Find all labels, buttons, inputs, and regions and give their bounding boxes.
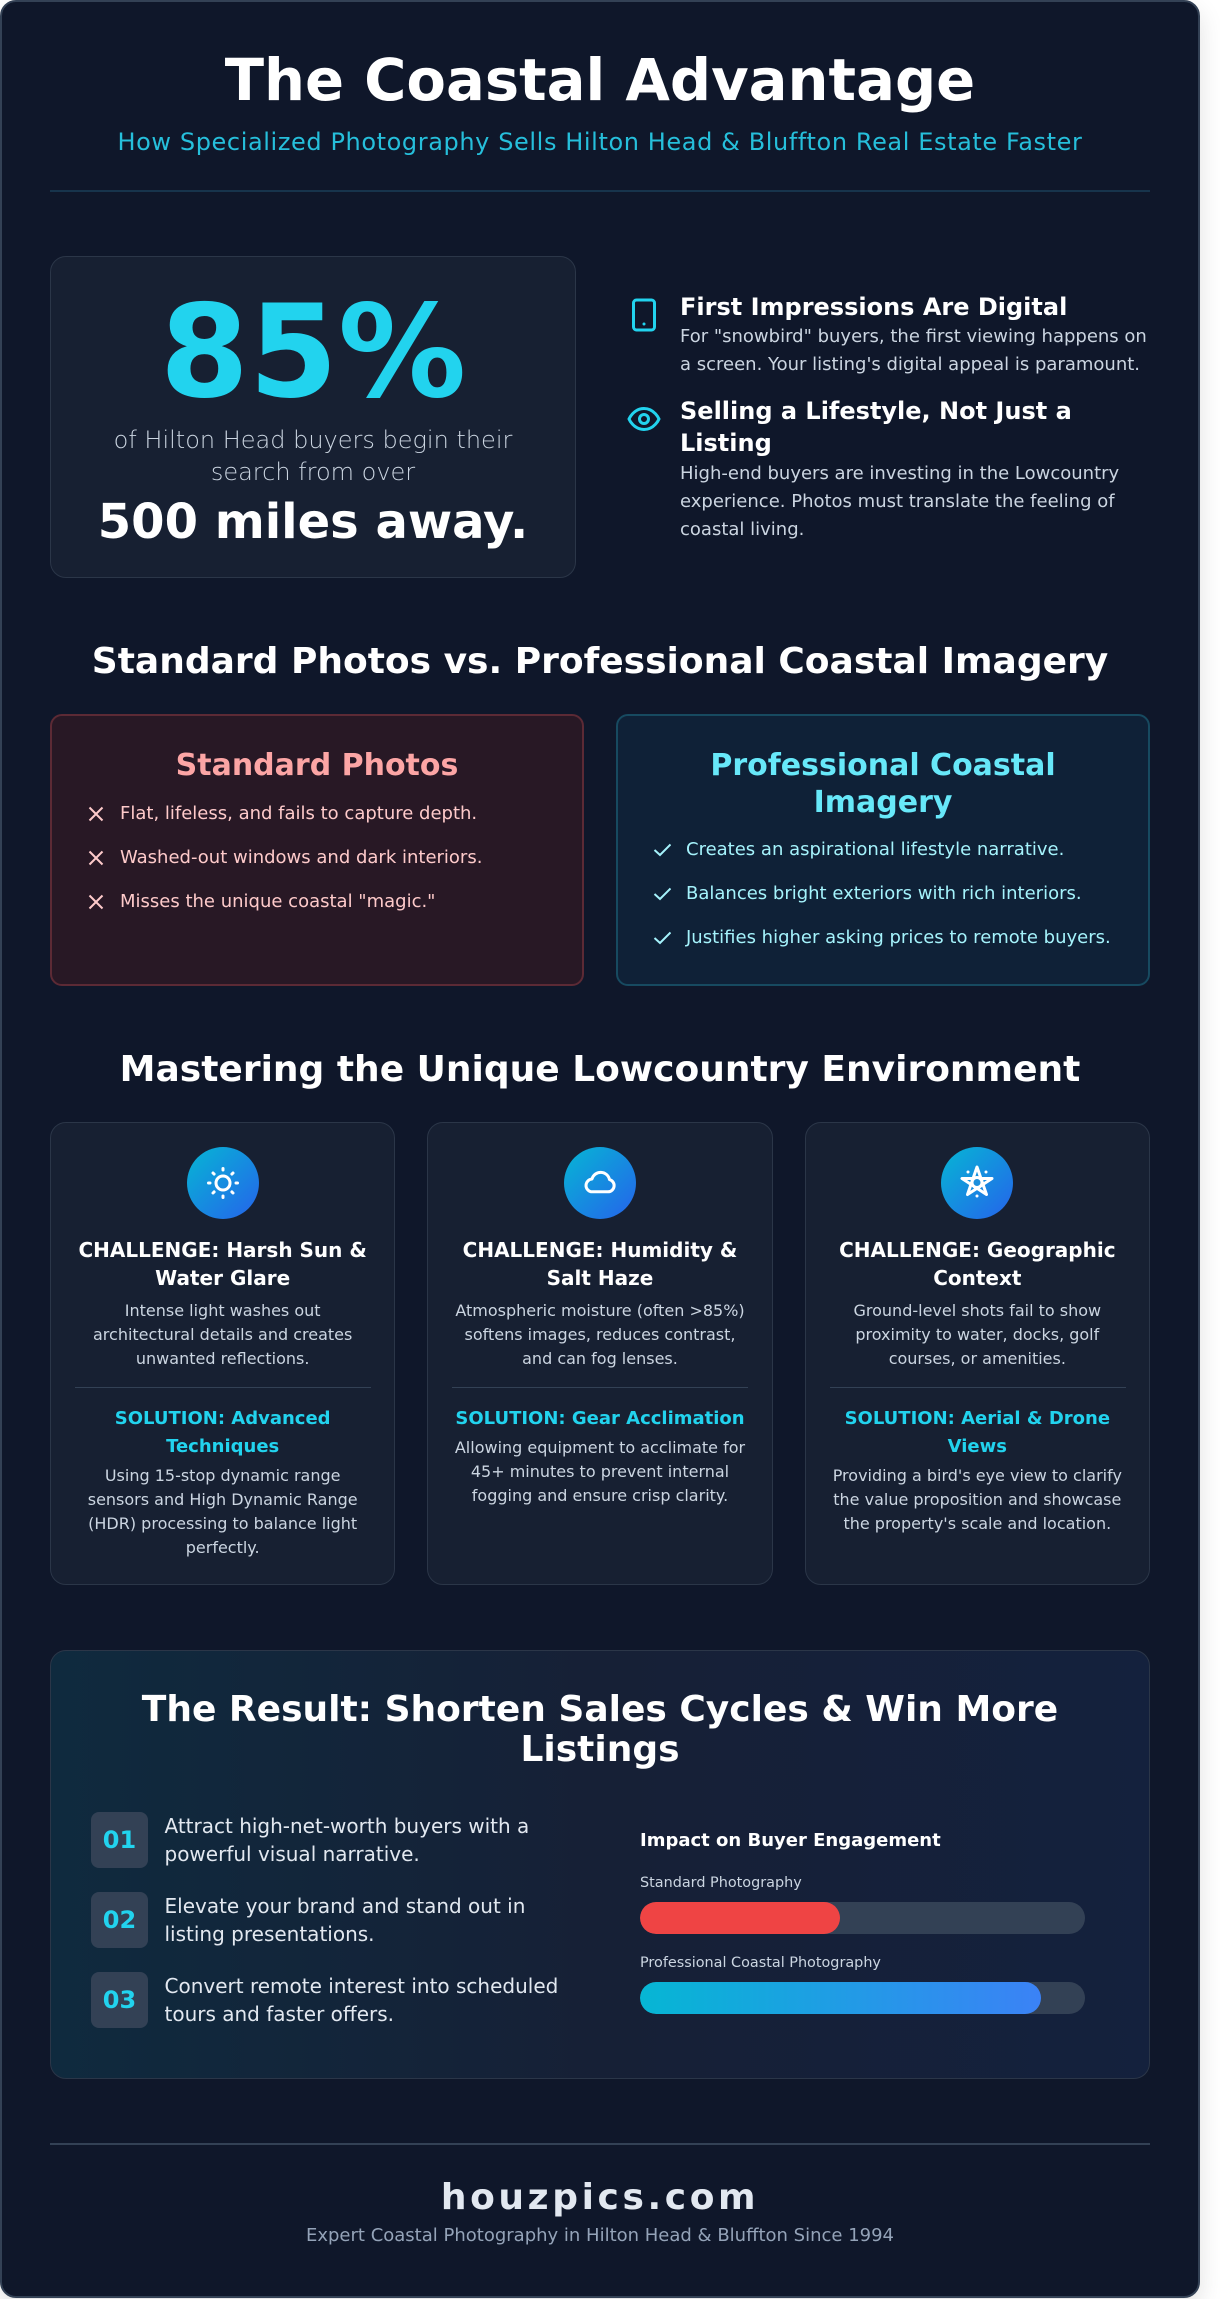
list: drawbacks: Flat, lifeless, and fails to capture depth. (120, 803, 477, 824)
benefit 1: powerful visual narrative. (164, 1842, 420, 1866)
solution text: (HDR) processing to balance light (88, 1514, 357, 1533)
solution text: the value proposition and showcase (833, 1490, 1121, 1509)
challenge text: architectural details and creates (93, 1325, 352, 1344)
big number: 85% (160, 278, 466, 427)
panel heading: Professional Coastal (710, 748, 1056, 783)
label: professional: Professional Coastal Photography (640, 1955, 881, 1971)
panel: professional imagery (616, 714, 1150, 986)
benefit 3: tours and faster offers. (164, 2002, 394, 2026)
challenge text: courses, or amenities. (889, 1349, 1066, 1368)
statistic description (114, 426, 512, 486)
list: result benefits (91, 1812, 558, 2028)
number 03: 03 (103, 1986, 136, 2014)
panel: standard photos (50, 714, 584, 986)
panel heading: Imagery (814, 785, 952, 820)
heading: first impressions: First Impressions Are Digital (680, 293, 1067, 321)
chart title: Impact on Buyer Engagement (640, 1830, 941, 1851)
icon: sun (187, 1147, 259, 1219)
solution title (115, 1408, 331, 1457)
number 01 (91, 1812, 148, 1868)
result heading: Listings (520, 1729, 680, 1770)
result heading: The Result: Shorten Sales Cycles & Win More (142, 1689, 1058, 1730)
panel: the result (50, 1650, 1150, 2079)
challenge text: Intense light washes out (125, 1301, 321, 1320)
challenge title: Context (933, 1266, 1021, 1290)
text: lifestyle: High-end buyers are investing in the Lowcountry (680, 463, 1119, 484)
benefit 2 (164, 1894, 525, 1946)
text: first impressions (680, 326, 1147, 375)
challenge text: Atmospheric moisture (often >85%) (455, 1301, 745, 1320)
heading: environment: Mastering the Unique Lowcountry Environment (120, 1049, 1080, 1090)
challenge text (455, 1301, 745, 1368)
solution text: Allowing equipment to acclimate for (455, 1438, 745, 1457)
solution text: 45+ minutes to prevent internal (471, 1462, 729, 1481)
icon: eye (628, 407, 660, 431)
panel heading: Standard Photos (176, 748, 458, 783)
list: benefits: Justifies higher asking prices to remote buyers. (686, 927, 1111, 948)
subtitle: How Specialized Photography Sells Hilton Head & Bluffton Real Estate Faster (118, 128, 1082, 156)
list: benefits: Creates an aspirational lifestyle narrative. (686, 839, 1064, 860)
list: drawbacks (88, 803, 482, 912)
text: lifestyle (680, 463, 1119, 540)
solution text: fogging and ensure crisp clarity. (472, 1486, 728, 1505)
footer brand: houzpics.com (441, 2177, 759, 2218)
result heading (142, 1689, 1058, 1770)
solution text: Providing a bird's eye view to clarify (833, 1466, 1122, 1485)
panel: geographic challenge (805, 1122, 1150, 1585)
list: drawbacks: Misses the unique coastal "magic." (120, 891, 435, 912)
challenge text (854, 1301, 1101, 1368)
solution text (833, 1466, 1122, 1533)
bar: standard 45% (640, 1902, 1085, 1934)
benefit 1 (164, 1814, 529, 1866)
solution title: Techniques (166, 1436, 279, 1457)
text: first impressions: a screen. Your listing's digital appeal is paramount. (680, 354, 1140, 375)
panel: harsh sun challenge (50, 1122, 395, 1585)
label: standard: Standard Photography (640, 1875, 802, 1891)
challenge title (839, 1238, 1116, 1290)
bar: professional 90% (640, 1982, 1085, 2014)
list: benefits (654, 839, 1111, 948)
panel: 85% statistic (50, 256, 576, 578)
heading: lifestyle: Selling a Lifestyle, Not Just a (680, 397, 1072, 425)
solution text: Using 15-stop dynamic range (105, 1466, 340, 1485)
panel: humidity challenge (427, 1122, 773, 1585)
challenge title: CHALLENGE: Harsh Sun & (78, 1238, 367, 1262)
challenge text: proximity to water, docks, golf (855, 1325, 1099, 1344)
panel heading (710, 748, 1056, 820)
solution title: SOLUTION: Aerial & Drone (845, 1408, 1110, 1429)
challenge title (463, 1238, 737, 1290)
list: drawbacks: Washed-out windows and dark interiors. (120, 847, 482, 868)
heading: lifestyle (680, 397, 1072, 457)
number 01: 01 (103, 1826, 136, 1854)
solution text: the property's scale and location. (843, 1514, 1111, 1533)
solution title: SOLUTION: Advanced (115, 1408, 331, 1429)
challenge text (93, 1301, 352, 1368)
solution text (455, 1438, 746, 1505)
challenge title: Salt Haze (547, 1266, 653, 1290)
heading: lifestyle: Listing (680, 429, 772, 457)
challenge title: Water Glare (155, 1266, 290, 1290)
benefit 1: Attract high-net-worth buyers with a (164, 1814, 529, 1838)
icon: smartphone (632, 298, 656, 332)
distance callout: 500 miles away. (98, 494, 528, 550)
challenge text: and can fog lenses. (522, 1349, 678, 1368)
solution text: sensors and High Dynamic Range (88, 1490, 358, 1509)
heading: comparison: Standard Photos vs. Professional Coastal Imagery (92, 641, 1108, 682)
benefit 3: Convert remote interest into scheduled (164, 1974, 558, 1998)
challenge title: CHALLENGE: Geographic (839, 1238, 1116, 1262)
icon: star drone (941, 1147, 1013, 1219)
text: lifestyle: experience. Photos must translate the feeling of (680, 491, 1115, 512)
benefit 2: Elevate your brand and stand out in (164, 1894, 525, 1918)
footer tagline: Expert Coastal Photography in Hilton Head & Bluffton Since 1994 (306, 2225, 894, 2246)
number 03 (91, 1972, 148, 2028)
solution title: Views (948, 1436, 1007, 1457)
challenge title: CHALLENGE: Humidity & (463, 1238, 737, 1262)
benefit 3 (164, 1974, 558, 2026)
solution title (845, 1408, 1110, 1457)
solution text (88, 1466, 358, 1557)
panel: key insights (628, 293, 1147, 540)
solution title: SOLUTION: Gear Acclimation (455, 1408, 745, 1429)
challenge text: softens images, reduces contrast, (464, 1325, 736, 1344)
text: first impressions: For "snowbird" buyers, the first viewing happens on (680, 326, 1147, 347)
title: The Coastal Advantage (225, 47, 975, 114)
number 02: 02 (103, 1906, 136, 1934)
challenge text: Ground-level shots fail to show (854, 1301, 1101, 1320)
icon: cloud (564, 1147, 636, 1219)
list: benefits: Balances bright exteriors with rich interiors. (686, 883, 1082, 904)
statistic description: of Hilton Head buyers begin their (114, 426, 512, 454)
bar chart: buyer engagement (640, 1830, 1085, 2014)
statistic description: search from over (211, 458, 415, 486)
challenge title (78, 1238, 367, 1290)
solution text: perfectly. (186, 1538, 260, 1557)
number 02 (91, 1892, 148, 1948)
benefit 2: listing presentations. (164, 1922, 375, 1946)
challenge text: unwanted reflections. (136, 1349, 309, 1368)
text: lifestyle: coastal living. (680, 519, 804, 540)
